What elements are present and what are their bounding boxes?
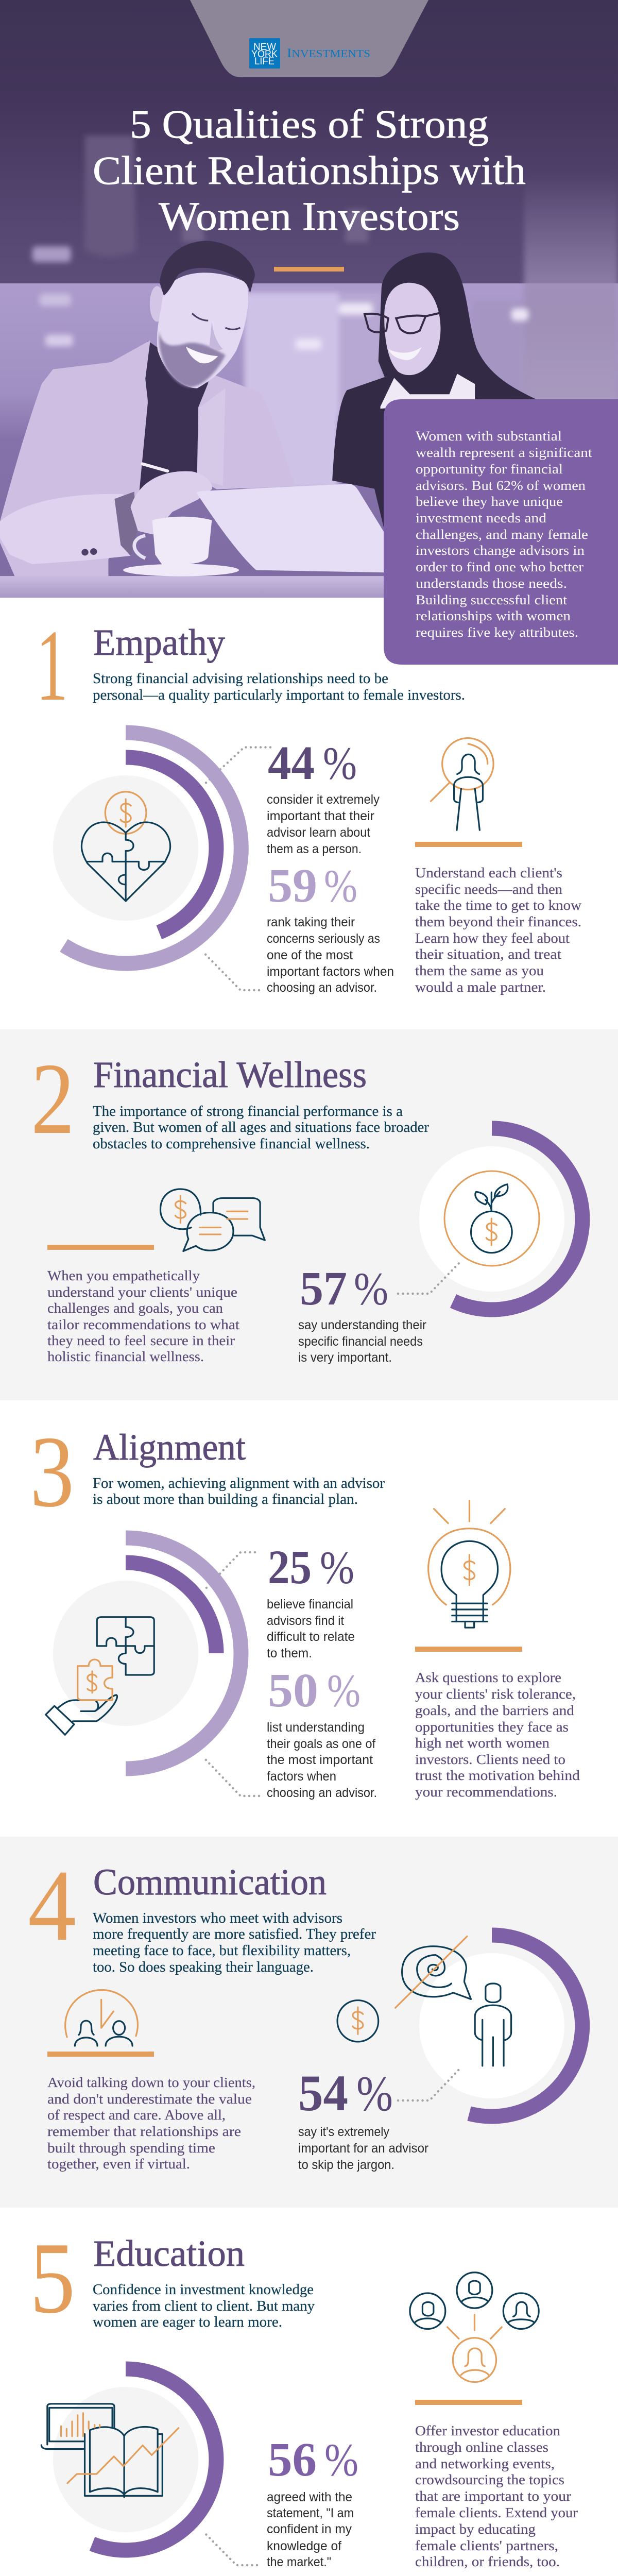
stat text 44%: important that their	[267, 809, 374, 823]
stat text 56%: agreed with the	[267, 2490, 352, 2504]
logo wordmark: INVESTMENTS	[287, 46, 370, 60]
icon: network of people	[410, 2273, 539, 2382]
advice text: challenges and goals, you can	[47, 1300, 224, 1316]
stat 56%	[268, 2433, 358, 2486]
intro card: Women with substantial	[416, 429, 562, 444]
heading: Education	[93, 2233, 245, 2274]
stat text 57%: specific financial needs	[298, 1334, 423, 1349]
panel: 2 financial wellness	[0, 1029, 618, 1400]
intro text: women are eager to learn more.	[93, 2314, 282, 2330]
title rule	[274, 267, 344, 272]
intro text: personal—a quality particularly important to female investors.	[93, 687, 465, 703]
advice text: children, or friends, too.	[415, 2554, 560, 2569]
advice text: together, even if virtual.	[47, 2156, 190, 2172]
heading: Financial Wellness	[93, 1054, 367, 1095]
stat text 44%: advisor learn about	[267, 825, 370, 840]
stat text 50%: factors when	[267, 1769, 336, 1784]
advice text: built through spending time	[47, 2140, 215, 2156]
ring chart 56%	[53, 2369, 216, 2550]
photo background	[0, 0, 618, 596]
heading: Alignment	[93, 1427, 246, 1468]
intro card: Building successful client	[416, 592, 568, 607]
stat 59%: %	[324, 861, 357, 912]
intro text	[93, 1910, 376, 1975]
intro text	[93, 1476, 385, 1507]
advice text: and networking events,	[415, 2456, 555, 2471]
stat 44%: 44	[268, 737, 315, 790]
accent bar	[415, 2400, 522, 2405]
intro card: order to find one who better	[416, 560, 583, 574]
number 4: 4	[28, 1849, 76, 1962]
stat text 56%: the market."	[267, 2555, 331, 2569]
number 1: 1	[36, 609, 68, 722]
stat text 54%	[298, 2125, 428, 2172]
icon: book, laptop and chart	[41, 2404, 179, 2497]
table with cup and laptop	[0, 484, 386, 598]
logo mark	[249, 38, 280, 69]
advice text: they need to feel secure in their	[47, 1333, 235, 1348]
stat text 25%: believe financial	[267, 1597, 353, 1612]
advice text: Ask questions to explore	[415, 1670, 561, 1685]
advice text: understand your clients' unique	[47, 1284, 237, 1300]
intro text: too. So does speaking their language.	[93, 1959, 314, 1975]
advice text: investors. Clients need to	[415, 1752, 565, 1767]
icon: lightbulb with dollar	[428, 1501, 510, 1628]
stat text 25%: advisors find it	[267, 1614, 344, 1628]
advice text: them the same as you	[415, 963, 544, 978]
stat 59%: 59	[268, 859, 317, 912]
stat 44%	[268, 737, 357, 790]
advice text: female clients' partners,	[415, 2538, 558, 2553]
man	[0, 241, 296, 582]
panel: 3 alignment	[30, 1415, 580, 1800]
intro text: Strong financial advising relationships need to be	[93, 671, 388, 687]
advice text: tailor recommendations to what	[47, 1317, 240, 1332]
icon: clock and two people	[65, 1990, 138, 2046]
stat text 59%: one of the most	[267, 948, 353, 962]
intro text: Women investors who meet with advisors	[93, 1910, 342, 1926]
stat 56%: %	[324, 2435, 358, 2486]
title: Client Relationships with	[93, 148, 526, 193]
stat text 57%: is very important.	[298, 1350, 392, 1365]
intro card: investors change advisors in	[416, 543, 585, 558]
stat text 50%: the most important	[267, 1753, 373, 1767]
intro text: obstacles to comprehensive financial wellness.	[93, 1136, 370, 1152]
stat text 59%: choosing an advisor.	[267, 980, 377, 995]
intro text	[93, 671, 465, 703]
stat 54%	[298, 2064, 393, 2122]
stat text 57%	[298, 1318, 426, 1365]
stat text 59%: rank taking their	[267, 915, 355, 929]
ring chart 57%	[419, 1128, 582, 1310]
stat text 59%: important factors when	[267, 964, 394, 979]
stat text 25%	[267, 1597, 355, 1660]
advice text: that are important to your	[415, 2488, 571, 2504]
stat text 56%: statement, "I am	[267, 2506, 354, 2520]
advice text: remember that relationships are	[47, 2124, 241, 2139]
advice text: them beyond their finances.	[415, 914, 581, 929]
stat text 54%: to skip the jargon.	[298, 2158, 394, 2172]
intro text: meeting face to face, but flexibility matters,	[93, 1943, 351, 1959]
intro card: opportunity for financial	[416, 462, 563, 477]
advice text: high net worth women	[415, 1735, 550, 1751]
leader dots	[398, 2068, 460, 2100]
advice text: and don't underestimate the value	[47, 2091, 252, 2107]
stat text 54%: important for an advisor	[298, 2141, 428, 2156]
woman	[332, 252, 536, 530]
advice text: opportunities they face as	[415, 1719, 569, 1735]
advice text: specific needs—and then	[415, 882, 563, 897]
advice text	[415, 1670, 580, 1800]
intro card: challenges, and many female	[416, 527, 588, 542]
title: 5 Qualities of Strong	[130, 101, 489, 146]
leader dots	[204, 747, 270, 785]
advice text: Offer investor education	[415, 2423, 561, 2438]
stat 57%: %	[354, 1264, 388, 1315]
advice text	[47, 2075, 255, 2172]
advice text: trust the motivation behind	[415, 1768, 580, 1783]
leader dots	[398, 1262, 460, 1294]
leader dots	[204, 953, 259, 990]
stat text 50%	[267, 1720, 377, 1800]
advice text: Avoid talking down to your clients,	[47, 2075, 255, 2090]
number 3: 3	[30, 1415, 74, 1528]
stat 25%: 25	[268, 1541, 312, 1594]
intro card	[384, 399, 618, 665]
stat text 56%	[267, 2490, 354, 2569]
advice text: impact by educating	[415, 2521, 536, 2537]
shirt	[139, 341, 210, 490]
intro text: is about more than building a financial plan.	[93, 1492, 358, 1507]
advice text: your recommendations.	[415, 1784, 557, 1800]
jacket	[0, 341, 150, 582]
leader dots	[204, 1758, 259, 1796]
stat 50%: %	[327, 1666, 360, 1717]
icon: speech bubbles with dollar	[160, 1189, 265, 1251]
advice text	[47, 1268, 240, 1364]
intro text: given. But women of all ages and situations face broader	[93, 1120, 430, 1136]
panel: 4 communication	[0, 1837, 618, 2208]
icon: heart puzzle with dollar	[81, 792, 170, 901]
intro card: advisors. But 62% of women	[416, 478, 586, 493]
icon: puzzle pieces in hand	[46, 1617, 154, 1735]
accent bar	[47, 1245, 154, 1250]
stat text 25%: to them.	[267, 1646, 312, 1660]
ring chart 54%	[419, 1935, 582, 2116]
stat text 59%: concerns seriously as	[267, 931, 380, 946]
intro text	[93, 2282, 315, 2330]
ring chart 44% and 59%	[53, 733, 241, 963]
panel: 1 empathy	[36, 609, 582, 995]
advice text: crowdsourcing the topics	[415, 2472, 564, 2487]
intro text: The importance of strong financial performance is a	[93, 1104, 403, 1120]
logo tab	[190, 0, 428, 77]
intro text: Confidence in investment knowledge	[93, 2282, 314, 2298]
logo mark: LIFE	[254, 56, 274, 67]
advice text	[415, 865, 582, 995]
leader dots	[204, 1552, 255, 1590]
advice text: goals, and the barriers and	[415, 1703, 575, 1718]
advice text: would a male partner.	[415, 979, 546, 995]
icon: person under magnifier	[431, 738, 493, 830]
stat 25%: %	[320, 1543, 354, 1594]
title	[93, 101, 526, 239]
hero photo: advisors at a table	[0, 0, 618, 598]
stat text 44%	[267, 792, 380, 856]
advice text: Learn how they feel about	[415, 930, 570, 946]
accent bar	[47, 2052, 154, 2057]
stat text 57%: say understanding their	[298, 1318, 426, 1332]
stat text 59%	[267, 915, 394, 995]
intro card: relationships with women	[416, 608, 571, 623]
intro text	[93, 1104, 430, 1152]
stat 54%: 54	[298, 2064, 348, 2122]
heading: Empathy	[93, 622, 225, 663]
stat text 56%: knowledge of	[267, 2539, 341, 2553]
stat text 50%: their goals as one of	[267, 1737, 375, 1751]
advice text: female clients. Extend your	[415, 2505, 578, 2520]
stat text 50%: choosing an advisor.	[267, 1786, 377, 1800]
advice text: of respect and care. Above all,	[47, 2107, 226, 2123]
head	[150, 286, 165, 322]
stat 25%	[268, 1541, 354, 1594]
stat 44%: %	[323, 738, 357, 789]
accent bar	[415, 842, 522, 847]
ring chart 25% and 50%	[53, 1538, 241, 1769]
number 5: 5	[30, 2222, 75, 2334]
stat 54%: %	[356, 2066, 393, 2121]
advice text	[415, 2423, 578, 2569]
panel: 5 education	[30, 2222, 578, 2569]
intro card: requires five key attributes.	[416, 625, 578, 640]
stat text 56%: confident in my	[267, 2522, 352, 2536]
stat 57%	[300, 1262, 388, 1315]
advice text: your clients' risk tolerance,	[415, 1686, 576, 1702]
advice text: When you empathetically	[47, 1268, 200, 1283]
advice text: holistic financial wellness.	[47, 1349, 204, 1364]
advice text: Understand each client's	[415, 865, 562, 880]
intro card: believe they have unique	[416, 494, 563, 509]
stat 56%: 56	[268, 2433, 317, 2486]
hand and pen	[130, 471, 212, 534]
number 2: 2	[31, 1042, 75, 1155]
stat text 25%: difficult to relate	[267, 1630, 355, 1644]
intro text: varies from client to client. But many	[93, 2298, 315, 2314]
stat 57%: 57	[300, 1262, 347, 1315]
stat 50%: 50	[268, 1664, 318, 1717]
stat text 44%: them as a person.	[267, 842, 362, 856]
advice text: their situation, and treat	[415, 946, 562, 962]
advice text: take the time to get to know	[415, 897, 582, 913]
sleeve	[0, 494, 130, 564]
intro card: investment needs and	[416, 511, 546, 526]
accent bar	[415, 1647, 522, 1652]
stat 59%	[268, 859, 357, 912]
stat text 50%: list understanding	[267, 1720, 365, 1735]
stat text 54%: say it's extremely	[298, 2125, 389, 2139]
title: Women Investors	[159, 194, 460, 239]
logo mark: YORK	[251, 49, 278, 60]
advice text: through online classes	[415, 2439, 548, 2455]
leader dots	[204, 2532, 257, 2565]
intro text: more frequently are more satisfied. They prefer	[93, 1926, 376, 1942]
intro card: wealth represent a significant	[416, 445, 593, 460]
heading: Communication	[93, 1861, 327, 1903]
stat text 44%: consider it extremely	[267, 792, 380, 807]
stat 50%	[268, 1664, 360, 1717]
icon: seedling dollar	[471, 1184, 512, 1253]
icon: jargon speech bubble, dollar and person	[337, 1936, 511, 2066]
intro card: understands those needs.	[416, 576, 567, 591]
logo mark: NEW	[253, 42, 276, 53]
intro text: For women, achieving alignment with an advisor	[93, 1476, 385, 1492]
